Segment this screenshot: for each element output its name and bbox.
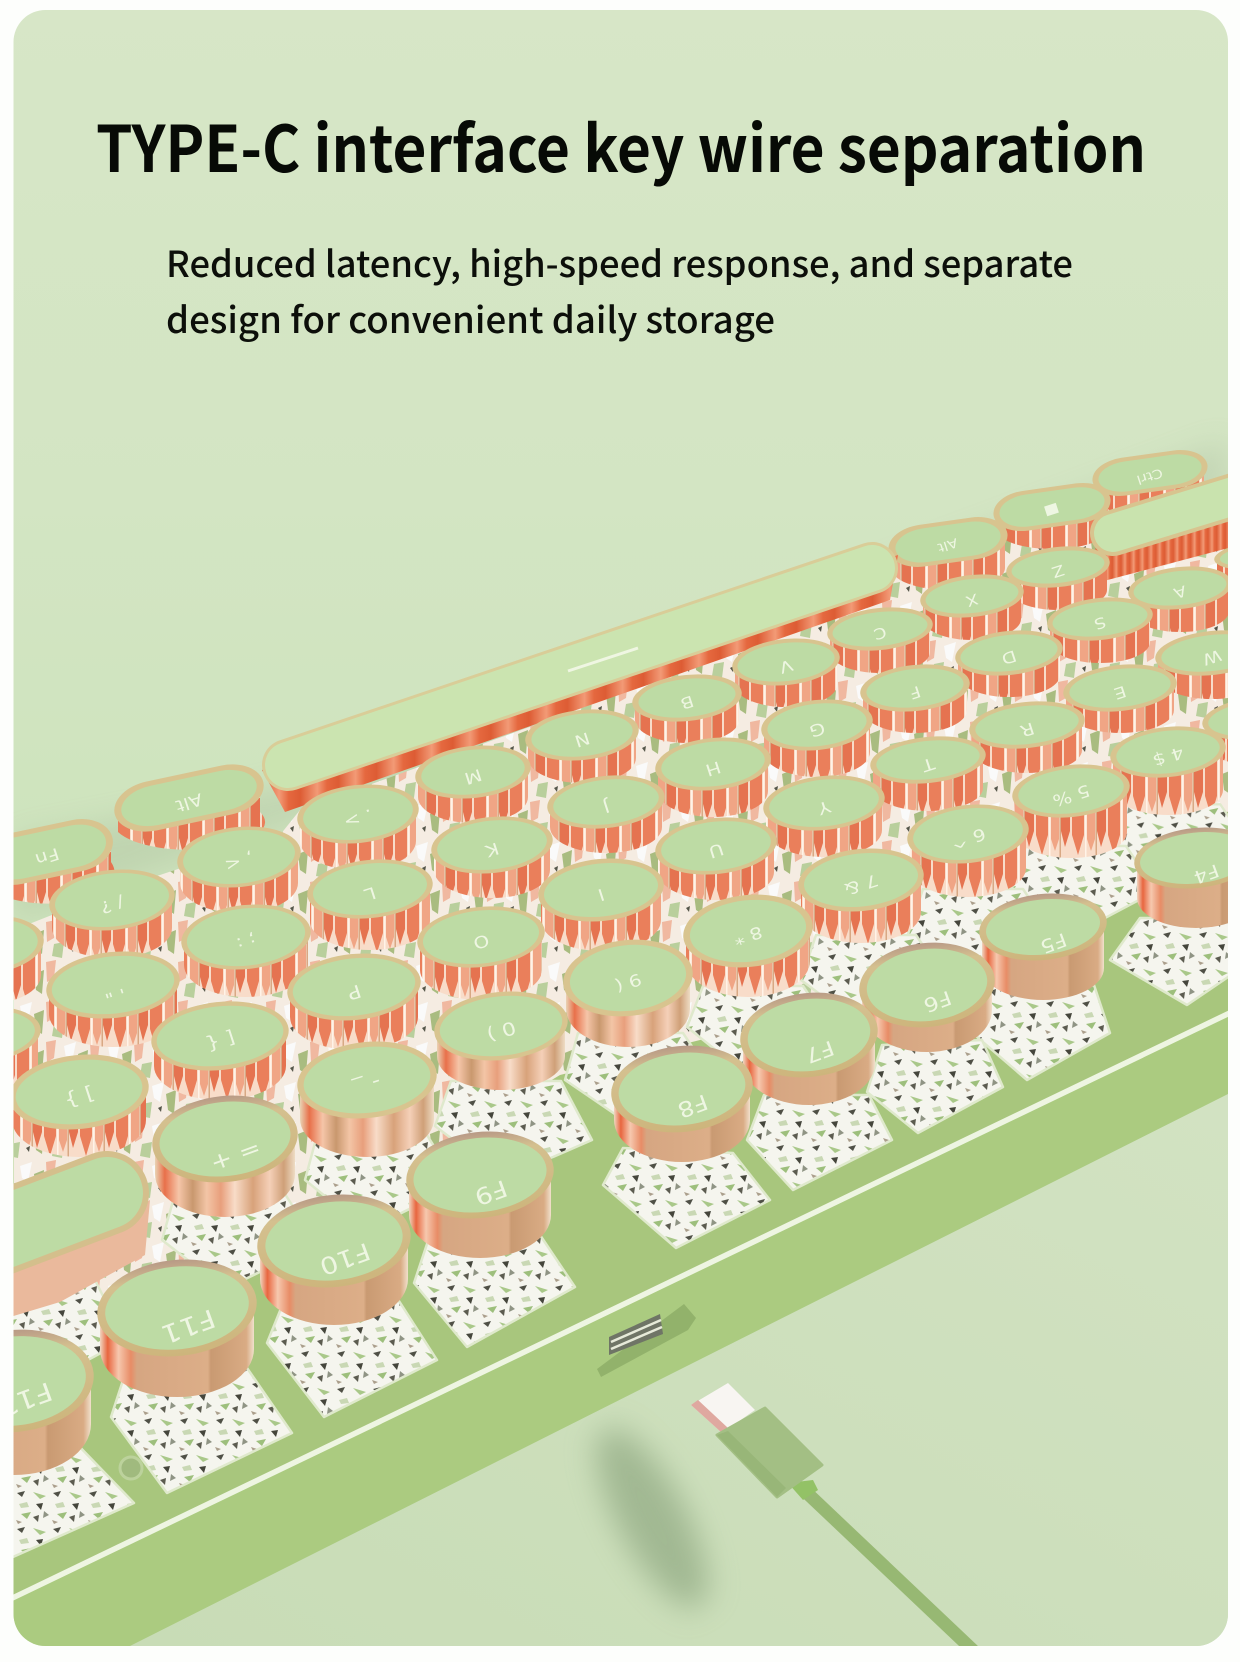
key: - _: - _ xyxy=(351,1071,384,1101)
screw on plate xyxy=(120,1457,142,1479)
key: 6^ xyxy=(904,799,1032,897)
key: Ctrl xyxy=(1092,450,1208,510)
switch: 9( crystal stem xyxy=(565,1033,713,1123)
key: = + xyxy=(148,1089,302,1217)
key: F5 xyxy=(976,887,1110,1000)
key: C xyxy=(825,603,935,673)
key: J: J xyxy=(600,796,613,816)
key: ' ": ' " xyxy=(100,977,126,1001)
key: Z: Z xyxy=(1050,561,1066,581)
key: P: P xyxy=(345,980,364,1005)
key: 5%: 5 % xyxy=(1050,780,1092,810)
Shift body xyxy=(1095,522,1228,580)
key: F xyxy=(858,659,972,733)
key: Ctrl: Ctrl xyxy=(1135,465,1164,487)
port recess xyxy=(597,1304,696,1377)
keyboard case front face xyxy=(0,1008,1240,1662)
key: / ? xyxy=(46,864,178,958)
key: X: X xyxy=(964,590,980,610)
cable cord xyxy=(807,1493,978,1655)
switch: 5% crystal stem xyxy=(1011,846,1156,936)
subtitle line 1: Reduced latency, high-speed response, and separate xyxy=(166,236,1073,288)
key: L xyxy=(304,854,436,950)
key: partial right edge Q xyxy=(1200,690,1240,766)
cable tip pink edge xyxy=(691,1400,728,1433)
key: S: S xyxy=(1092,613,1108,633)
key: ; : xyxy=(178,898,314,997)
key: F12 xyxy=(0,1322,99,1475)
switch: F9 crystal stem xyxy=(414,1235,575,1347)
spacebar face xyxy=(288,568,872,765)
key: K: K xyxy=(482,838,501,860)
cable housing lower side xyxy=(717,1431,786,1497)
key: O xyxy=(414,900,548,1000)
key: F9: F9 xyxy=(471,1174,511,1211)
switch: F5 crystal stem xyxy=(977,982,1110,1080)
key: = +: = + xyxy=(207,1135,264,1177)
key: A: A xyxy=(1171,582,1188,602)
key: N xyxy=(523,704,641,783)
key: I: I xyxy=(595,884,607,904)
key: ; :: ; : xyxy=(234,929,258,953)
key: U: U xyxy=(706,839,726,861)
key: A xyxy=(1128,566,1228,632)
cable green housing xyxy=(717,1408,822,1497)
key: M: M xyxy=(462,764,484,788)
Enter face xyxy=(0,1193,107,1245)
switch: F8 crystal stem xyxy=(603,1148,770,1248)
shadow: cable shadow on desk xyxy=(585,1420,719,1616)
Shift face xyxy=(1113,491,1240,533)
key: [ {: [ { xyxy=(203,1026,238,1056)
key: right Alt xyxy=(888,517,1008,588)
spacebar dash mark xyxy=(568,648,638,671)
key: 5% xyxy=(1010,759,1132,858)
key: F9 xyxy=(402,1125,558,1258)
key: Y: Y xyxy=(814,796,834,818)
switch: 0) crystal stem xyxy=(435,1081,592,1176)
white edge stripe on case xyxy=(0,1008,1240,1604)
key: partial left edge lower xyxy=(0,1001,44,1093)
key: F11 xyxy=(92,1252,262,1397)
key: , <: , < xyxy=(222,848,256,875)
key: Fn xyxy=(0,813,118,904)
key: R: R xyxy=(1017,718,1037,740)
key: 8*: 8 * xyxy=(731,922,765,948)
title: TYPE-C interface key wire separation xyxy=(96,99,1146,191)
key: F10 xyxy=(253,1187,415,1325)
key: 9(: 9 ( xyxy=(612,969,644,995)
key: 7&: 7 & xyxy=(842,870,880,898)
key: right Alt: Alt xyxy=(935,535,959,555)
key: 0): 0 ) xyxy=(484,1016,519,1046)
key: X xyxy=(918,570,1026,640)
key: 6^: 6 ^ xyxy=(948,824,988,852)
key: W: W xyxy=(1200,645,1224,668)
key: T xyxy=(868,731,988,811)
key: 4$ xyxy=(1108,721,1228,815)
key: F10: F10 xyxy=(316,1236,374,1280)
switch: = + crystal stem xyxy=(162,1194,317,1289)
key: 8* xyxy=(680,888,816,997)
key: U xyxy=(652,812,780,900)
switch: F12 crystal stem xyxy=(0,1436,134,1561)
key: I xyxy=(535,853,667,951)
key: left Alt: Alt xyxy=(173,789,205,815)
key: F4: F4 xyxy=(1191,860,1222,888)
key: F7: F7 xyxy=(802,1035,837,1067)
key: H: H xyxy=(703,757,723,779)
key: G xyxy=(759,694,875,777)
key: Fn: Fn xyxy=(33,843,61,869)
key: M xyxy=(413,740,533,823)
Enter body xyxy=(0,1200,150,1320)
key: / ?: / ? xyxy=(98,891,126,917)
key: L: L xyxy=(361,882,378,904)
key: Z xyxy=(1004,542,1112,610)
key: [ { xyxy=(148,995,292,1100)
keyboard top plate xyxy=(14,902,1228,1594)
cable neck xyxy=(792,1480,818,1500)
key: V xyxy=(730,633,842,707)
key: G: G xyxy=(807,718,827,740)
key: K xyxy=(428,811,556,898)
switch: 4$ crystal stem xyxy=(1111,804,1240,890)
key: F11: F11 xyxy=(157,1303,219,1350)
key: . >: . > xyxy=(341,805,375,832)
Enter rim xyxy=(0,1193,107,1245)
key: B: B xyxy=(678,691,696,712)
key: S xyxy=(1045,593,1155,663)
spacebar rim xyxy=(288,568,872,765)
switch: - _ crystal stem xyxy=(305,1135,458,1230)
subtitle text block xyxy=(166,236,1073,344)
switch: F4 crystal stem xyxy=(1110,918,1240,1005)
key: W xyxy=(1153,625,1240,699)
key: 4$: 4 $ xyxy=(1150,742,1186,770)
key: T: T xyxy=(918,753,938,775)
switch: 7& crystal stem xyxy=(801,935,946,1025)
background: soft shadow behind keyboard rear edge xyxy=(14,440,1228,920)
key: partial right edge xyxy=(1214,548,1228,576)
key: F8 xyxy=(607,1039,757,1162)
switch: F11 crystal stem xyxy=(111,1368,292,1493)
key: Shift xyxy=(0,0,1240,582)
key: Y xyxy=(761,770,887,857)
key: ] } xyxy=(6,1048,152,1157)
switch: F7 crystal stem xyxy=(747,1095,892,1190)
key: F4 xyxy=(1131,822,1240,928)
spacebar body xyxy=(262,555,898,812)
port socket highlight xyxy=(611,1320,662,1349)
switch: F6 crystal stem xyxy=(867,1040,1003,1133)
key: partial left edge upper xyxy=(0,910,47,1004)
background: desk surface in front of keyboard xyxy=(1198,1616,1228,1646)
Enter switch stem xyxy=(0,1270,125,1375)
cable metal tip xyxy=(691,1383,755,1433)
subtitle line 2: design for convenient daily storage xyxy=(166,292,775,344)
keyboard keys drawn back to front xyxy=(14,450,1228,1558)
key: F6: F6 xyxy=(920,985,954,1016)
key: O: O xyxy=(471,930,491,952)
key: F6 xyxy=(855,936,999,1052)
Shift rim xyxy=(1113,491,1240,533)
key: F: F xyxy=(907,681,923,702)
switch: 8* crystal stem xyxy=(687,986,833,1076)
switch: F10 crystal stem xyxy=(267,1301,437,1417)
port socket xyxy=(609,1314,663,1355)
key: V: V xyxy=(777,655,795,676)
key: 0) xyxy=(431,985,571,1090)
Type-C port on keyboard xyxy=(597,1304,696,1377)
key: F7 xyxy=(736,986,882,1105)
Type-C cable xyxy=(691,1383,978,1655)
key: C: C xyxy=(871,623,889,643)
key: 9( xyxy=(559,933,697,1047)
switch: 6^ crystal stem xyxy=(908,889,1053,979)
key: E xyxy=(1061,659,1179,733)
key: H xyxy=(653,732,773,817)
key: Enter pill with arrow xyxy=(0,0,150,1375)
key: B xyxy=(630,669,744,743)
key: F5: F5 xyxy=(1037,928,1070,958)
key: F8: F8 xyxy=(674,1089,711,1122)
key: , < xyxy=(174,821,304,913)
key: N: N xyxy=(572,728,592,750)
key: Win xyxy=(991,479,1113,549)
switch bed behind keycaps xyxy=(14,480,1228,1350)
key: D xyxy=(953,625,1065,697)
key: E: E xyxy=(1111,681,1128,702)
key: ' " xyxy=(43,945,183,1047)
key: R xyxy=(967,696,1087,773)
key: Win: ■ xyxy=(1042,501,1061,520)
key: J xyxy=(545,770,667,853)
key: 7& xyxy=(795,843,927,943)
key: ] }: ] } xyxy=(61,1082,98,1113)
key: P xyxy=(284,947,424,1050)
key: left Alt xyxy=(109,758,269,850)
key: . > xyxy=(294,779,422,870)
spacebar xyxy=(262,555,898,812)
key: D: D xyxy=(999,646,1019,667)
key: - _ xyxy=(293,1035,441,1157)
